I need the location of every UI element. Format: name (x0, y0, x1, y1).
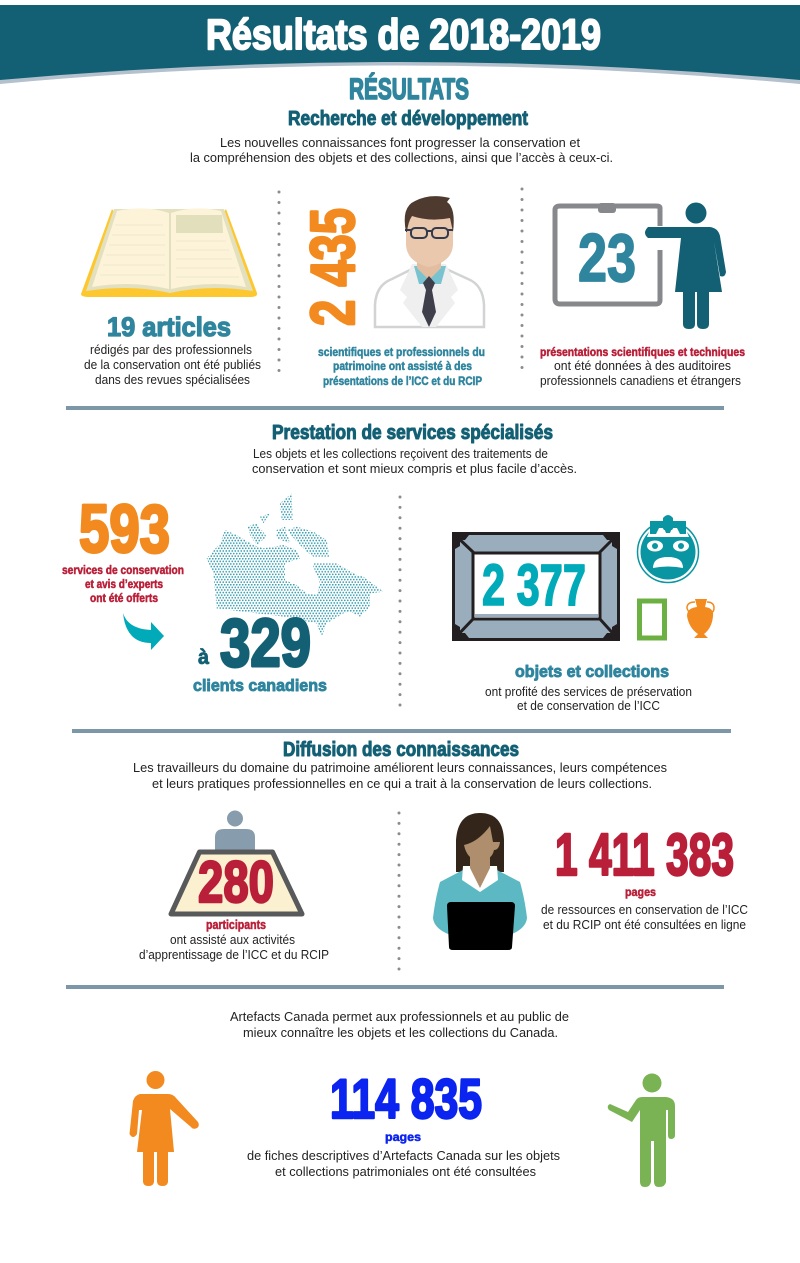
scientists text (318, 345, 485, 388)
panel: presentations (540, 202, 745, 388)
section heading: research: Recherche et développement (288, 108, 528, 130)
title: Résultats de 2018-2019 (206, 11, 601, 59)
articles text (84, 343, 261, 387)
stat: 19 articles: 19 articles (107, 312, 231, 342)
stat: à 329: 329 (220, 605, 311, 681)
panel: scientists (299, 196, 485, 388)
articles text: de la conservation ont été publiés (84, 358, 261, 372)
services label: ont été offerts (90, 593, 158, 605)
Artefacts Canada intro text: mieux connaître les objets et les collections du Canada. (243, 1026, 558, 1040)
section heading: knowledge: Diffusion des connaissances (283, 739, 519, 761)
presentations text: ont été données à des auditoires (554, 359, 731, 373)
participants text (139, 933, 329, 962)
icon: curved arrow (123, 613, 164, 650)
Artefacts text: de fiches descriptives d’Artefacts Canada sur les objets (247, 1149, 560, 1163)
presentations text (540, 345, 745, 388)
header banner (0, 5, 800, 84)
main heading: RÉSULTATS (349, 72, 469, 106)
panel: clients (62, 491, 383, 695)
stat: 593: 593 (79, 491, 170, 567)
articles text: rédigés par des professionnels (90, 343, 252, 357)
stat: 2 435 rotated: 2 435 (299, 208, 368, 326)
scientists text: présentations de l’ICC et du RCIP (323, 374, 482, 388)
objects text: et de conservation de l’ICC (517, 699, 660, 713)
participants text: d’apprentissage de l’ICC et du RCIP (139, 948, 329, 962)
icon: woman presenter (645, 202, 726, 329)
Artefacts text (247, 1149, 560, 1179)
stat: 23: 23 (578, 220, 636, 296)
icon: open book (81, 208, 257, 297)
icon: green frame (640, 601, 664, 638)
scientists text: patrimoine ont assisté à des (333, 359, 472, 373)
services label (62, 565, 184, 605)
services intro text: Les objets et les collections reçoivent des traitements de (253, 447, 548, 461)
objects text: ont profité des services de préservation (485, 685, 692, 699)
Artefacts Canada intro text (230, 1010, 569, 1040)
knowledge intro text (133, 761, 667, 791)
knowledge intro text: et leurs pratiques professionnelles en ce qui a trait à la conservation de leurs collections. (152, 777, 652, 791)
knowledge intro text: Les travailleurs du domaine du patrimoine améliorent leurs connaissances, leurs compétences (133, 761, 667, 775)
panel: articles (81, 208, 261, 387)
research intro text (190, 136, 613, 165)
services label: et avis d’experts (85, 579, 163, 591)
stat: à 329: à (198, 646, 209, 669)
section heading: services: Prestation de services spécialisés (272, 422, 553, 444)
presentations text: professionnels canadiens et étrangers (540, 374, 741, 388)
services intro text: conservation et sont mieux compris et plus facile d’accès. (252, 462, 577, 476)
panel: objects (454, 515, 714, 713)
scientists text: scientifiques et professionnels du (318, 345, 485, 359)
icon: scientist (375, 196, 484, 327)
Artefacts text: et collections patrimoniales ont été consultées (275, 1165, 536, 1179)
services intro text (252, 447, 577, 476)
icon: presentation board (555, 203, 660, 304)
objects heading: objets et collections (515, 662, 669, 681)
articles text: dans des revues spécialisées (95, 373, 250, 387)
stat: 280: 280 (198, 850, 274, 915)
panel: pages consulted (433, 813, 748, 950)
panel: Artefacts Canada (130, 1067, 675, 1187)
participants label: participants (206, 918, 266, 932)
presentations text: présentations scientifiques et techniques (540, 345, 745, 359)
stat: 114 835: 114 835 (330, 1067, 482, 1130)
clients label: clients canadiens (193, 676, 327, 695)
panel: participants (139, 810, 329, 962)
stat: 2 377: 2 377 (482, 553, 586, 618)
icon: green man (608, 1074, 675, 1187)
research intro text: Les nouvelles connaissances font progresser la conservation et (220, 136, 581, 150)
pages text: et du RCIP ont été consultées en ligne (543, 918, 746, 932)
stat: à 329 (198, 605, 311, 681)
map: dotted Canada (207, 493, 383, 637)
pages label: pages (625, 885, 656, 899)
Artefacts Canada intro text: Artefacts Canada permet aux professionnels et au public de (230, 1010, 569, 1024)
research intro text: la compréhension des objets et des collections, ainsi que l’accès à ceux-ci. (190, 151, 613, 165)
icon: vase (687, 599, 714, 638)
icon: orange woman (130, 1071, 199, 1186)
pages text (541, 903, 748, 932)
participants text: ont assisté aux activités (170, 933, 295, 947)
icon: mask (638, 515, 698, 582)
icon: woman with laptop (433, 813, 527, 950)
pages text: de ressources en conservation de l’ICC (541, 903, 748, 917)
icon: person at lectern (171, 810, 302, 914)
services label: services de conservation (62, 565, 184, 577)
objects text (485, 685, 692, 713)
pages label: pages (385, 1130, 421, 1144)
icon: picture frame (454, 534, 618, 640)
